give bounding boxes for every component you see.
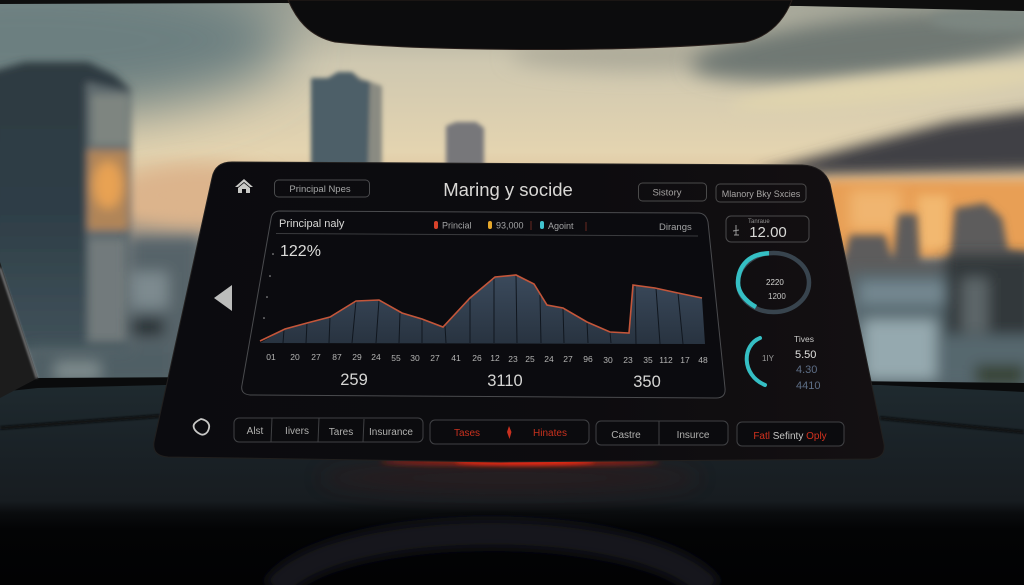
donut gauge: 2220 — [766, 278, 784, 287]
x axis labels: 27 — [311, 352, 321, 362]
button: Fatl Sefinty Oply — [737, 422, 844, 446]
button: Memory Bky Series — [716, 184, 806, 202]
stat box: 12.00: 12.00 — [749, 224, 787, 241]
arc gauge — [747, 338, 775, 385]
red under-glow — [320, 458, 700, 494]
x axis labels — [266, 352, 708, 365]
x axis labels: 20 — [290, 352, 300, 362]
button group: tabs: Insurance — [369, 427, 413, 438]
totals — [340, 371, 661, 391]
totals: 350 — [633, 373, 661, 391]
x axis labels: 27 — [430, 353, 440, 363]
button group: tabs — [234, 418, 423, 442]
stats list: 4.30 — [796, 364, 817, 376]
stats list: 4410 — [796, 380, 820, 392]
x axis labels: 30 — [410, 353, 420, 363]
button group: red alerts — [430, 420, 589, 444]
totals: 259 — [340, 371, 368, 389]
x axis labels: 48 — [698, 355, 708, 365]
stat box: 12.00: Tanraue — [748, 219, 770, 225]
x axis labels: 01 — [266, 352, 276, 362]
button group: Castre / Insurce — [596, 421, 728, 445]
button: Principal Npes — [274, 180, 370, 197]
x axis labels: 24 — [371, 352, 381, 362]
legend — [434, 220, 692, 233]
button group: red alerts: Tases — [454, 428, 480, 439]
left A-pillar — [0, 262, 38, 398]
icon: home — [235, 179, 253, 193]
x axis labels: 26 — [472, 353, 482, 363]
roof edge — [0, 0, 1024, 11]
x axis labels: 25 — [525, 354, 535, 364]
button: Sistory: Sistory — [652, 188, 682, 198]
steering wheel — [275, 534, 710, 585]
x axis labels: 12 — [490, 353, 500, 363]
donut gauge — [738, 253, 809, 312]
distant center towers — [311, 72, 484, 170]
big percentage: 122% — [280, 243, 321, 260]
stat box: 12.00 — [726, 216, 809, 242]
legend: Princial — [442, 220, 472, 230]
button: Principal Npes: Principal Npes — [289, 184, 351, 195]
button group: tabs: Iivers — [285, 426, 309, 437]
totals: 3110 — [487, 372, 523, 390]
left tower — [0, 62, 131, 350]
arc gauge: 1IY — [762, 354, 775, 363]
icon: settings ring — [194, 419, 209, 435]
stats list: Tives — [794, 334, 814, 344]
x axis labels: 96 — [583, 354, 593, 364]
button group: red alerts: Hinates — [533, 428, 567, 439]
x axis labels: 55 — [391, 353, 401, 363]
legend: Agoint — [548, 221, 574, 231]
button: Memory Bky Series: Mlanory Bky Sxcies — [722, 189, 801, 199]
button group: tabs: Tares — [329, 427, 353, 438]
button group: tabs: Alst — [247, 426, 264, 437]
lower right blurred city — [850, 255, 1024, 384]
icon: back arrow — [214, 285, 232, 311]
right skyline — [838, 203, 1024, 300]
donut gauge: 1200 — [768, 292, 786, 301]
panel: chart — [242, 211, 725, 398]
button: Sistory — [638, 183, 706, 201]
stats list: 5.50 — [795, 349, 816, 361]
x axis labels: 112 — [659, 355, 673, 365]
button group: Castre / Insurce: Castre — [611, 430, 641, 441]
x axis labels: 23 — [623, 355, 633, 365]
title: Maring y socide — [443, 179, 573, 200]
stats list — [794, 334, 820, 392]
chart heading: Principal naly — [279, 218, 345, 230]
area chart — [260, 275, 705, 344]
legend: 93,000 — [496, 220, 524, 230]
x axis labels: 27 — [563, 354, 573, 364]
x axis labels: 17 — [680, 355, 690, 365]
button: Fatl Sefinty Oply: Fatl Sefinty Oply — [753, 431, 827, 442]
background: blurred sunset city through windshield — [0, 0, 1024, 400]
x axis labels: 41 — [451, 353, 461, 363]
x axis labels: 23 — [508, 354, 518, 364]
panel: dashboard screen — [154, 162, 884, 462]
button group: Castre / Insurce: Insurce — [677, 430, 710, 441]
dashboard — [0, 376, 1024, 585]
y axis dots — [263, 253, 274, 319]
x axis labels: 87 — [332, 352, 342, 362]
x axis labels: 24 — [544, 354, 554, 364]
x axis labels: 29 — [352, 352, 362, 362]
lower left blurred city — [30, 238, 200, 383]
rear-view mirror — [288, 0, 792, 50]
x axis labels: 35 — [643, 355, 653, 365]
x axis labels: 30 — [603, 355, 613, 365]
legend: Dirangs — [659, 222, 692, 233]
